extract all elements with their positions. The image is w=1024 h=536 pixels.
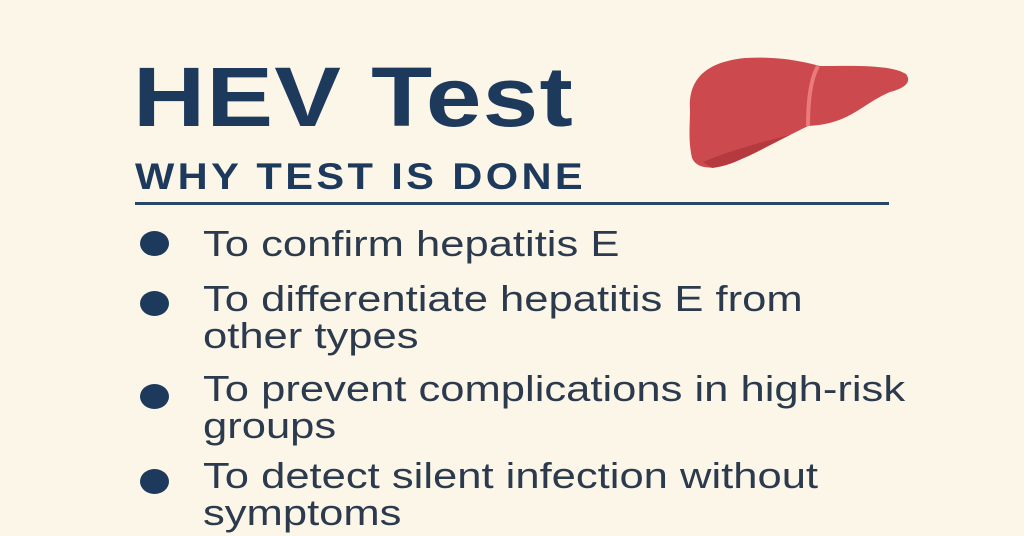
bullet 2: other types [203, 315, 419, 356]
bullet 3: To prevent complications in high-risk [203, 368, 905, 409]
subtitle: WHY TEST IS DONE [135, 156, 586, 197]
bullet 3: groups [203, 405, 336, 446]
bullet 4 [140, 455, 818, 533]
icon: liver [690, 58, 908, 168]
bullet 4: To detect silent infection without [203, 455, 818, 496]
bullet 1: To confirm hepatitis E [203, 223, 619, 264]
bullet 2 [140, 278, 803, 356]
bullet 4: symptoms [203, 492, 401, 533]
bullet 3 [140, 368, 906, 446]
bullet 2: To differentiate hepatitis E from [203, 278, 803, 319]
title: HEV Test [133, 50, 574, 144]
